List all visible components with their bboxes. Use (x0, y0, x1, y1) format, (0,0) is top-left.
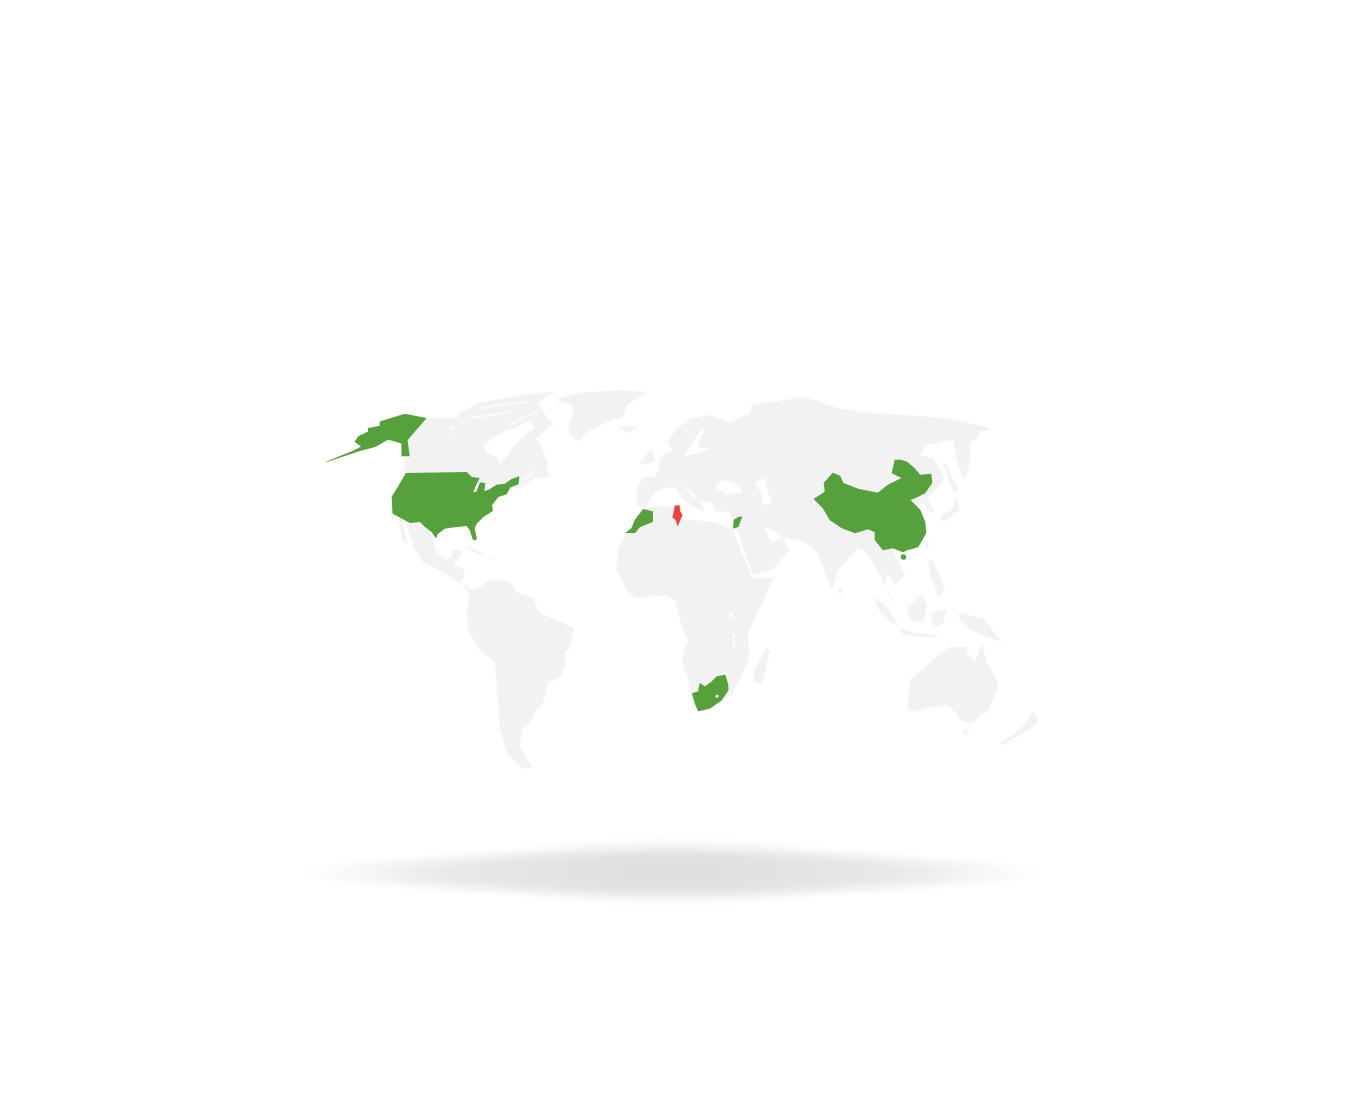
Madagascar (753, 648, 770, 683)
Jordan (733, 517, 742, 528)
New Zealand (1000, 712, 1038, 745)
Tasmania (963, 728, 970, 736)
Caspian Sea (755, 478, 772, 505)
China (814, 460, 932, 552)
Iceland (618, 426, 637, 433)
Mexico and Central America (407, 520, 473, 598)
highlighted country: Tunisia in red (673, 506, 682, 526)
Canadian lakes (447, 426, 455, 438)
Greenland (555, 390, 647, 442)
Sulawesi (930, 610, 947, 627)
Gulf of St Lawrence (520, 468, 537, 481)
Cuba (465, 547, 487, 555)
South Africa (692, 675, 728, 711)
Java (898, 628, 943, 637)
Canada and Arctic islands (403, 392, 553, 490)
Japan (940, 497, 960, 522)
Borneo (907, 593, 927, 622)
Hudson Bay (483, 420, 535, 465)
Arctic channels (470, 402, 540, 425)
UK and Ireland (640, 448, 655, 465)
South America (467, 579, 574, 769)
Sri Lanka (838, 585, 843, 593)
Alaska (327, 414, 426, 462)
Australia (907, 643, 998, 722)
Black Sea (715, 480, 743, 495)
Morocco (626, 509, 653, 533)
Lake Victoria (729, 612, 733, 618)
New Guinea (958, 613, 1002, 642)
Africa (616, 506, 773, 708)
Sumatra (873, 597, 900, 627)
USA mainland (392, 472, 519, 540)
Sakhalin and Hokkaido (942, 462, 958, 492)
Hainan (901, 554, 906, 560)
grey landmasses (398, 390, 1038, 769)
Lake Malawi (733, 632, 735, 650)
Hispaniola (488, 557, 498, 560)
Philippines (928, 560, 945, 597)
Baltic Sea (683, 428, 712, 456)
ground shadow (296, 835, 1048, 909)
world land base layer (398, 390, 1038, 769)
Baja California (398, 518, 409, 546)
Taiwan (925, 541, 929, 549)
Eurasia (637, 397, 990, 603)
highlighted countries: green (327, 414, 932, 711)
inland seas and bays (447, 402, 772, 650)
Adriatic (682, 483, 697, 498)
